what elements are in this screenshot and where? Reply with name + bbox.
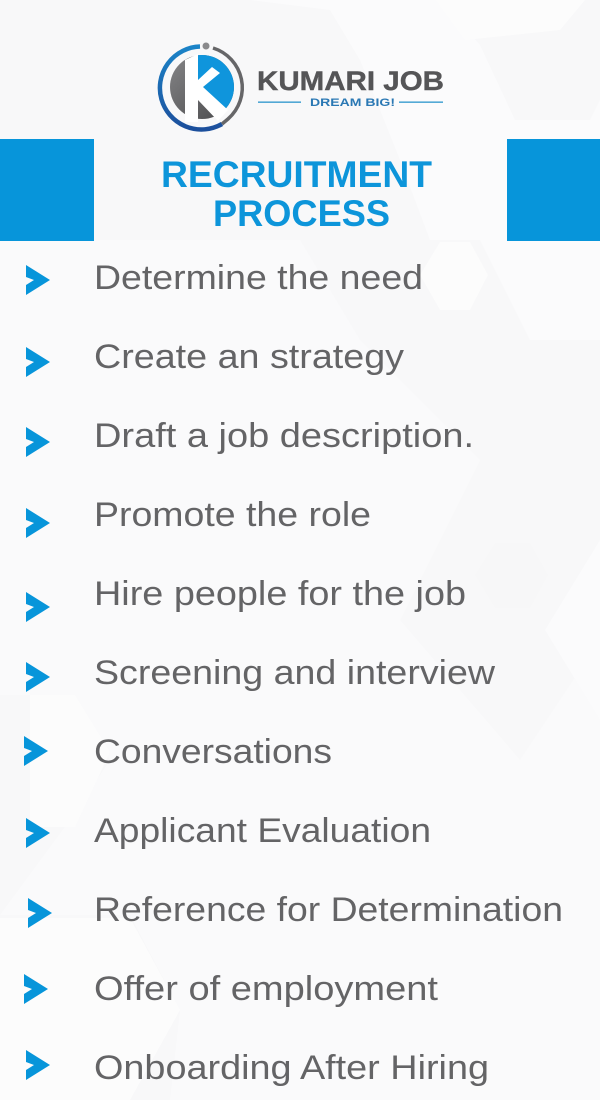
step 8: applicant evaluation: Applicant Evaluation <box>94 812 431 850</box>
left blue block <box>0 139 94 241</box>
arrow icon <box>26 662 50 692</box>
arrow icon <box>26 818 50 848</box>
arrow icon <box>26 265 50 295</box>
arrow icon <box>26 427 50 457</box>
step 7: conversations: Conversations <box>94 733 332 771</box>
step 11: onboarding after hiring: Onboarding After Hiring <box>94 1049 489 1087</box>
title: RECRUITMENT <box>161 154 432 195</box>
logo K letter <box>185 54 228 122</box>
arrow icon <box>26 1050 50 1080</box>
arrow icon <box>24 736 48 766</box>
title: PROCESS <box>213 193 390 234</box>
logo ring <box>160 46 242 129</box>
logo <box>160 42 444 129</box>
arrow icon <box>26 508 50 538</box>
logo wordmark: KUMARI JOB <box>257 66 444 96</box>
arrow icon <box>26 592 50 622</box>
title <box>161 154 432 234</box>
step 4: promote the role: Promote the role <box>94 496 371 534</box>
step 5: hire people for the job: Hire people for the job <box>94 575 466 613</box>
logo tagline: DREAM BIG! <box>310 97 395 109</box>
arrow icon <box>28 898 52 928</box>
step 10: offer of employment: Offer of employment <box>94 970 439 1008</box>
step 4: promote the role <box>26 496 371 538</box>
step 9: reference for determination: Reference for Determination <box>94 891 563 929</box>
step 5: hire people for the job <box>26 575 466 622</box>
arrow icon <box>26 347 50 377</box>
step 6: screening and interview: Screening and interview <box>94 654 495 692</box>
step 2: create an strategy: Create an strategy <box>94 338 404 376</box>
step 3: draft a job description: Draft a job description. <box>94 417 474 455</box>
right blue block <box>507 139 600 241</box>
logo disc <box>170 55 234 119</box>
logo dot <box>202 42 210 50</box>
step 1: determine the need: Determine the need <box>94 259 423 297</box>
arrow icon <box>24 974 48 1004</box>
